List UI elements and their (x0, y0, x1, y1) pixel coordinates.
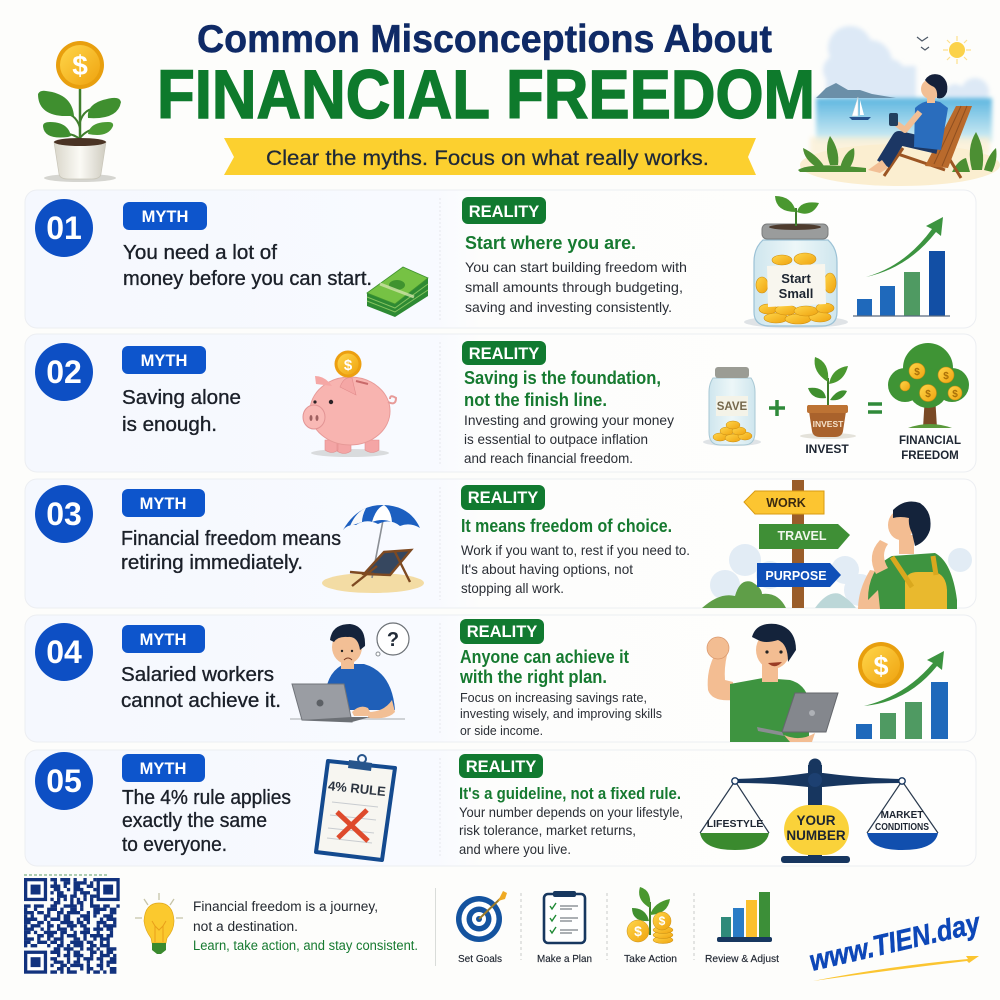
your number label (784, 805, 849, 855)
reality text: and where you live. (459, 841, 571, 857)
myth text: retiring immediately. (121, 552, 303, 574)
icon: start small jar (744, 196, 848, 328)
traveller (858, 502, 957, 609)
title: financial freedom: FINANCIAL FREEDOM (157, 56, 815, 133)
myth text (122, 787, 291, 856)
icon: money tree: $ (952, 389, 958, 400)
reality heading (464, 368, 661, 410)
reality text (465, 259, 687, 315)
number badge: 04 (46, 634, 82, 670)
banner (224, 138, 756, 175)
footer message: Learn, take action, and stay consistent. (193, 938, 418, 953)
myth text: Financial freedom means (121, 528, 341, 550)
illustration: signpost and traveller (702, 480, 972, 609)
myth text: cannot achieve it. (121, 690, 281, 712)
icon: cash stack (367, 267, 428, 317)
reality tag (459, 754, 543, 778)
reality text: It's about having options, not (461, 561, 633, 577)
icon: 4% rule clipboard: 4% RULE (327, 778, 387, 799)
icon: invest plant: INVEST (813, 419, 844, 429)
reality tag (461, 485, 545, 510)
icon: 4% rule clipboard (316, 755, 395, 860)
myth tag: MYTH (141, 352, 187, 370)
reality heading: with the right plan. (459, 667, 607, 687)
reality text (460, 690, 662, 738)
illustration: balance scale: LIFESTYLE (707, 818, 763, 830)
icon: lightbulb (135, 893, 183, 954)
myth text: Saving alone (122, 387, 241, 409)
reality text: investing wisely, and improving skills (460, 706, 662, 721)
qr code (24, 875, 120, 974)
myth tag: MYTH (140, 495, 186, 513)
icon: money tree (888, 343, 969, 462)
myth tag (122, 346, 206, 374)
step: set goals (456, 891, 507, 965)
step: make a plan: Make a Plan (537, 953, 592, 965)
number badge: 02 (46, 354, 82, 390)
myth tag: MYTH (140, 760, 186, 778)
sign: work: WORK (766, 496, 806, 510)
panel: row 03 (25, 479, 976, 609)
thought bubble: ? (387, 629, 399, 651)
reality text: You can start building freedom with (465, 259, 687, 275)
step: take action (624, 887, 677, 965)
reality text: Focus on increasing savings rate, (460, 690, 647, 705)
birds (917, 37, 929, 50)
your number label: YOUR (796, 813, 836, 828)
reality heading: Anyone can achieve it (460, 647, 629, 667)
title line: Common Misconceptions About (197, 18, 772, 61)
plus sign (769, 400, 785, 416)
reality tag: REALITY (468, 489, 538, 507)
sun (943, 36, 971, 64)
icon: start small jar: Start (781, 271, 811, 286)
number badge: 01 (46, 210, 82, 246)
reality tag (462, 197, 546, 224)
myth text: to everyone. (122, 834, 227, 856)
reality heading: not the finish line. (464, 390, 607, 410)
icon: money tree: FINANCIAL (899, 435, 961, 447)
reality tag (462, 341, 546, 365)
reality text: is essential to outpace inflation (464, 431, 648, 447)
myth text: Salaried workers (121, 664, 274, 686)
step: make a plan (537, 891, 592, 965)
myth text (122, 387, 241, 436)
reality heading (459, 647, 629, 687)
sign: purpose: PURPOSE (765, 569, 827, 583)
person in deck chair (868, 74, 972, 178)
icon: save jar (703, 367, 761, 446)
icon: invest plant: INVEST (805, 442, 849, 456)
step: take action: Take Action (624, 953, 677, 965)
reality heading: Start where you are. (465, 233, 636, 253)
myth text: You need a lot of (123, 242, 277, 264)
reality text: Work if you want to, rest if you need to. (461, 542, 690, 558)
reality heading: It means freedom of choice. (461, 516, 672, 536)
number badge (35, 752, 93, 810)
icon: worried worker at laptop (290, 623, 409, 722)
equals sign (868, 404, 882, 412)
reality text: risk tolerance, market returns, (459, 822, 636, 838)
reality text (461, 542, 690, 596)
icon: piggy bank (303, 350, 396, 457)
panel: row 05 (25, 750, 976, 866)
chart: rising bars with arrow (856, 651, 948, 739)
icon: beach chair and umbrella (322, 505, 424, 593)
reality text (459, 804, 683, 857)
reality heading: Saving is the foundation, (464, 368, 661, 388)
icon: invest plant (800, 357, 856, 456)
number badge (35, 199, 93, 257)
reality text: Investing and growing your money (464, 412, 674, 428)
your number label: NUMBER (786, 828, 846, 843)
reality text: small amounts through budgeting, (465, 279, 683, 295)
footer message: not a destination. (193, 919, 298, 934)
icon: coin plant: $ (72, 50, 88, 81)
step: review and adjust (705, 892, 779, 965)
chart: rising bars with arrow (853, 217, 950, 316)
reality text: stopping all work. (461, 580, 564, 596)
reality tag: REALITY (469, 345, 539, 363)
myth text: The 4% rule applies (122, 787, 291, 809)
icon: money tree: $ (914, 367, 920, 378)
reality text: and reach financial freedom. (464, 450, 633, 466)
number badge: 03 (46, 496, 82, 532)
icon: money tree: $ (925, 389, 931, 400)
illustration: balance scale (700, 758, 938, 863)
banner: Clear the myths. Focus on what really works. (266, 147, 709, 170)
sign: work (744, 491, 824, 514)
myth tag (122, 754, 205, 782)
reality tag: REALITY (467, 623, 537, 641)
footer message (193, 899, 418, 953)
number badge (35, 343, 93, 401)
illustration: beach scene (798, 26, 1000, 186)
icon: coin plant (38, 41, 121, 182)
reality text: saving and investing consistently. (465, 299, 672, 315)
myth text: exactly the same (122, 810, 267, 832)
step: set goals: Set Goals (458, 953, 502, 965)
panel: row 02 (25, 334, 976, 472)
illustration: confident person with laptop (707, 624, 838, 742)
reality tag: REALITY (469, 203, 539, 221)
illustration: balance scale: MARKET (881, 810, 923, 821)
icon: dollar coin: $ (873, 651, 889, 681)
step: take action: $ (659, 914, 666, 928)
reality tag: REALITY (466, 758, 536, 776)
reality heading: It's a guideline, not a fixed rule. (459, 785, 681, 803)
myth text: is enough. (122, 414, 217, 436)
number badge (35, 485, 93, 543)
myth tag: MYTH (140, 631, 186, 649)
number badge (35, 623, 93, 681)
myth text (121, 528, 341, 574)
myth tag (123, 202, 207, 230)
step: take action: $ (634, 923, 642, 939)
reality text: or side income. (460, 723, 543, 738)
reality tag (460, 619, 544, 644)
myth text (121, 664, 281, 712)
panel: row 04 (25, 615, 976, 742)
icon: piggy bank: $ (344, 357, 353, 374)
icon: start small jar: Small (779, 286, 813, 301)
sign: travel (759, 524, 850, 549)
sign: travel: TRAVEL (777, 529, 827, 543)
myth text (123, 242, 372, 290)
myth tag: MYTH (142, 208, 188, 226)
myth text: money before you can start. (123, 268, 372, 290)
myth tag (122, 489, 205, 517)
footer message: Financial freedom is a journey, (193, 899, 378, 914)
icon: save jar: SAVE (717, 401, 748, 413)
reality text: Your number depends on your lifestyle, (459, 804, 683, 820)
panel: row 01 (25, 190, 976, 328)
icon: money tree: FREEDOM (901, 450, 959, 462)
icon: money tree: $ (943, 371, 949, 382)
reality text (464, 412, 674, 466)
illustration: balance scale: CONDITIONS (875, 822, 929, 833)
icon: dollar coin (858, 642, 904, 688)
myth tag (122, 625, 205, 653)
number badge: 05 (46, 763, 82, 799)
sign: purpose (757, 563, 841, 587)
step: review and adjust: Review & Adjust (705, 953, 779, 965)
